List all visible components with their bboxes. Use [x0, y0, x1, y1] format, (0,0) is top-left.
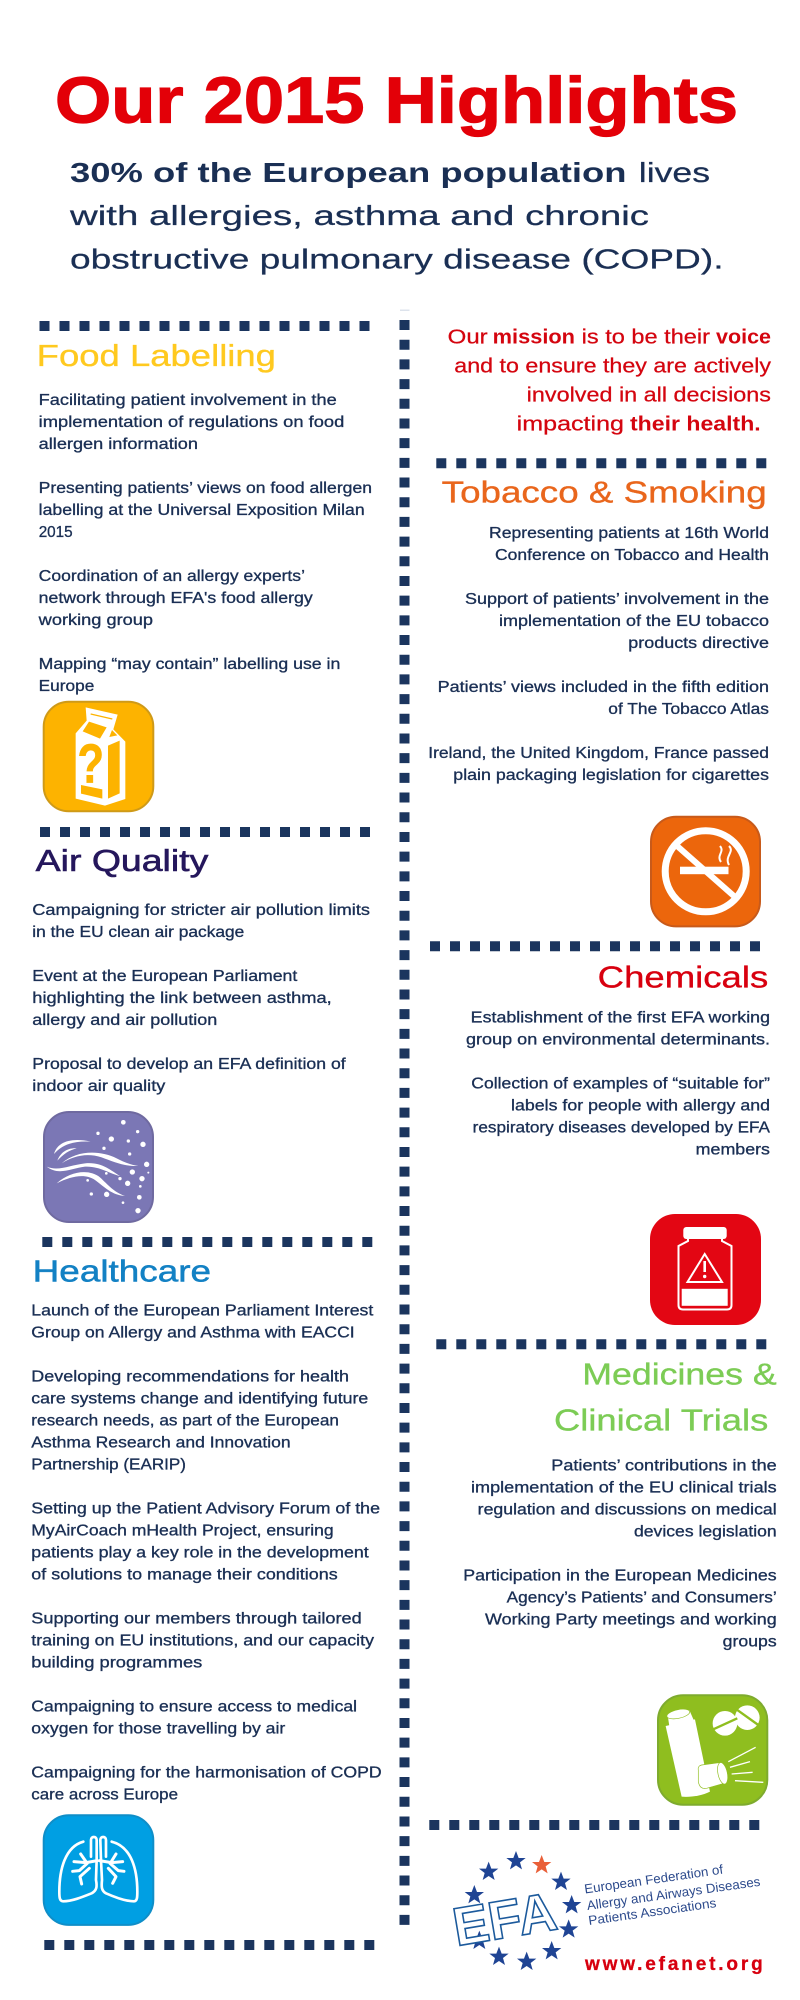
text block: air quality achievements: Event at the European Parliament [32, 968, 298, 985]
icon: lungs [44, 1815, 153, 1925]
icon: chemical bottle with warning [650, 1214, 761, 1325]
text block: medicines achievements: Participation in the European Medicines [463, 1568, 777, 1585]
mission statement: Our [448, 325, 488, 348]
text block: air quality achievements: Proposal to develop an EFA definition of [32, 1056, 346, 1073]
panel: medicines and clinical trials [463, 1356, 777, 1805]
text block: food labelling achievements: network through EFA's food allergy [39, 590, 313, 607]
heading: food labelling: Food Labelling [37, 338, 276, 373]
text block: tobacco achievements: Representing patients at 16th World [489, 525, 769, 542]
intro statement [69, 157, 724, 274]
organisation name: Patients Associations [587, 1895, 718, 1928]
title: Our 2015 Highlights [55, 64, 738, 137]
text block: air quality achievements: indoor air quality [32, 1078, 166, 1095]
mission statement: is to be their [582, 325, 710, 348]
organisation name [583, 1862, 762, 1928]
intro statement: with allergies, asthma and chronic [69, 200, 649, 231]
text block: chemicals achievements: Establishment of the first EFA working [471, 1010, 770, 1026]
text block: tobacco achievements: Support of patients’ involvement in the [465, 591, 769, 608]
text block: healthcare achievements: building programmes [31, 1655, 203, 1672]
intro statement: obstructive pulmonary disease (COPD). [70, 243, 724, 274]
icon: no smoking [651, 817, 760, 926]
icon: milk carton with question mark: ? [77, 733, 104, 795]
text block: chemicals achievements: labels for people with allergy and [511, 1098, 770, 1114]
text block: food labelling achievements: Europe [39, 678, 94, 695]
icon: air particles and wisps [44, 1112, 153, 1222]
text block: healthcare achievements: Group on Allergy and Asthma with EACCI [31, 1325, 355, 1342]
text block: food labelling achievements [38, 392, 372, 695]
mission statement: involved in all decisions [527, 384, 771, 407]
text block: medicines achievements: Working Party meetings and working [485, 1612, 777, 1629]
text block: tobacco achievements [428, 525, 769, 784]
heading: healthcare: Healthcare [33, 1254, 211, 1289]
text block: air quality achievements [32, 902, 370, 1095]
text block: healthcare achievements: training on EU institutions, and our capacity [31, 1633, 374, 1650]
text block: healthcare achievements: Developing recommendations for health [31, 1369, 349, 1386]
text block: healthcare achievements: MyAirCoach mHealth Project, ensuring [31, 1523, 334, 1540]
heading: chemicals: Chemicals [598, 959, 768, 994]
text block: food labelling achievements: labelling at the Universal Exposition Milan [39, 502, 365, 519]
text block: chemicals achievements [466, 1010, 771, 1158]
text block: tobacco achievements: plain packaging legislation for cigarettes [453, 767, 769, 784]
panel: air quality [32, 843, 370, 1222]
text block: medicines achievements: regulation and discussions on medical [478, 1502, 777, 1519]
text block: tobacco achievements: implementation of the EU tobacco [499, 613, 769, 630]
text block: healthcare achievements: Campaigning to ensure access to medical [31, 1699, 357, 1716]
text block: tobacco achievements: Conference on Tobacco and Health [495, 547, 769, 564]
text block: chemicals achievements: members [696, 1142, 770, 1158]
text block: food labelling achievements: Coordination of an allergy experts’ [39, 568, 305, 585]
icon: EFA star circle [465, 1851, 581, 1970]
mission statement: and to ensure they are actively [454, 355, 772, 378]
text block: healthcare achievements: oxygen for those travelling by air [31, 1720, 285, 1738]
text block: chemicals achievements: respiratory diseases developed by EFA [473, 1120, 771, 1136]
text block: medicines achievements: groups [723, 1634, 777, 1651]
text block: medicines achievements: Patients’ contributions in the [551, 1458, 777, 1475]
text block: healthcare achievements: Launch of the European Parliament Interest [31, 1303, 374, 1320]
text block: food labelling achievements: 2015 [39, 524, 73, 541]
panel: healthcare [31, 1254, 382, 1925]
logo: EFA [449, 1851, 763, 1975]
text block: healthcare achievements: of solutions to manage their conditions [31, 1567, 338, 1584]
mission statement [448, 325, 772, 436]
panel: tobacco and smoking [428, 475, 769, 926]
text block: tobacco achievements: of The Tobacco Atlas [608, 701, 769, 718]
text block: healthcare achievements: Supporting our members through tailored [31, 1611, 362, 1628]
organisation name: Allergy and Airways Diseases [586, 1874, 762, 1913]
text block: healthcare achievements: Partnership (EARIP) [31, 1457, 186, 1474]
text block: air quality achievements: Campaigning for stricter air pollution limits [32, 902, 370, 919]
text block: healthcare achievements: care across Europe [31, 1786, 178, 1804]
text block: food labelling achievements: allergen information [39, 436, 198, 453]
text block: food labelling achievements: Mapping “may contain” labelling use in [39, 656, 340, 673]
organisation name: European Federation of [583, 1862, 724, 1896]
mission statement: their health. [630, 413, 761, 436]
text block: chemicals achievements: group on environmental determinants. [466, 1032, 770, 1048]
text block: healthcare achievements: research needs, as part of the European [31, 1413, 339, 1430]
text block: healthcare achievements: Asthma Research and Innovation [31, 1435, 291, 1452]
text block: healthcare achievements: Campaigning for the harmonisation of COPD [31, 1764, 382, 1782]
text block: air quality achievements: highlighting the link between asthma, [32, 990, 332, 1007]
text block: healthcare achievements: Setting up the Patient Advisory Forum of the [31, 1501, 380, 1518]
text block: tobacco achievements: products directive [628, 635, 769, 652]
text block: air quality achievements: allergy and air pollution [32, 1012, 217, 1029]
intro statement: lives [639, 157, 710, 188]
text block: medicines achievements: Agency’s Patients’ and Consumers’ [507, 1590, 777, 1607]
text block: air quality achievements: in the EU clean air package [32, 924, 244, 941]
text block: food labelling achievements: working group [38, 612, 153, 629]
heading: air quality: Air Quality [36, 843, 209, 878]
icon: milk carton with question mark [44, 702, 153, 811]
text block: food labelling achievements: Presenting patients’ views on food allergen [39, 480, 372, 497]
mission statement: voice [716, 325, 771, 348]
text block: tobacco achievements: Ireland, the United Kingdom, France passed [428, 745, 769, 762]
text block: chemicals achievements: Collection of examples of “suitable for” [471, 1076, 770, 1092]
text block: healthcare achievements [31, 1303, 382, 1804]
panel: chemicals [466, 959, 771, 1325]
mission statement: impacting [517, 413, 624, 436]
mission statement: mission [493, 325, 575, 348]
intro statement: 30% of the European population [70, 157, 626, 188]
text block: food labelling achievements: implementation of regulations on food [39, 414, 344, 431]
heading: medicines and clinical trials: Clinical Trials [554, 1403, 768, 1438]
icon: inhaler and pills [658, 1695, 767, 1805]
heading: medicines and clinical trials [554, 1356, 777, 1438]
heading: tobacco and smoking: Tobacco & Smoking [442, 475, 767, 510]
text block: medicines achievements [463, 1458, 777, 1651]
text block: healthcare achievements: care systems change and identifying future [31, 1391, 368, 1408]
text block: food labelling achievements: Facilitating patient involvement in the [39, 392, 337, 409]
text block: medicines achievements: devices legislation [634, 1524, 777, 1541]
text block: healthcare achievements: patients play a key role in the development [31, 1545, 369, 1562]
text block: medicines achievements: implementation of the EU clinical trials [471, 1480, 777, 1497]
panel: food labelling [37, 338, 372, 811]
website url: www.efanet.org [584, 1954, 763, 1975]
heading: medicines and clinical trials: Medicines & [582, 1356, 777, 1391]
text block: tobacco achievements: Patients’ views included in the fifth edition [438, 679, 769, 696]
wordmark: EFA: EFA [449, 1881, 561, 1958]
